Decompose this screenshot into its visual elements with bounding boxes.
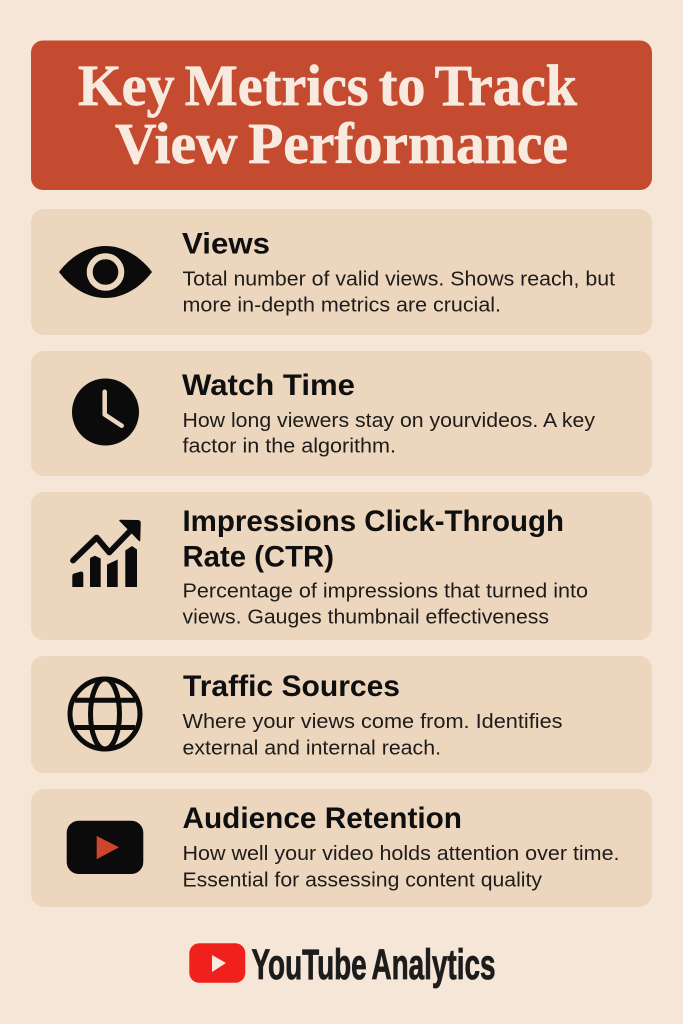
icon: eye [59,246,152,298]
panel: traffic sources [31,656,652,773]
text: traffic sources description [182,711,562,760]
icon: clock [72,378,139,446]
text: audience retention description: Essential for assessing content quality [182,870,542,892]
text: watch time description [182,410,595,458]
panel: impressions click-through rate [31,492,652,640]
text: audience retention description [182,843,620,892]
text: watch time description: How long viewers stay on yourvideos. A key [182,410,595,432]
panel: audience retention [31,789,652,907]
heading: watch time: Watch Time [182,369,355,402]
text: views description: Total number of valid views. Shows reach, but [182,269,615,291]
icon: YouTube logo [189,943,245,983]
heading: audience retention: Audience Retention [182,802,462,835]
panel: watch time [31,351,652,476]
text: traffic sources description: Where your views come from. Identifies [182,711,562,733]
text: traffic sources description: external and internal reach. [182,738,441,760]
heading: impressions click-through rate [182,505,564,574]
text: watch time description: factor in the algorithm. [182,436,396,458]
text: impressions description: Percentage of impressions that turned into [182,581,588,603]
icon: growth chart [72,520,140,587]
footer: YouTube Analytics logo [189,941,496,989]
title banner [31,40,652,190]
title banner: Key Metrics to Track [78,53,578,118]
heading: traffic sources: Traffic Sources [183,670,400,703]
heading: impressions click-through rate: Rate (CTR) [182,540,334,574]
heading: views: Views [182,228,270,260]
title banner: View Performance [115,111,568,176]
text: audience retention description: How well your video holds attention over time. [182,843,620,865]
panel: views [31,209,652,335]
wordmark: YouTube Analytics [252,941,496,989]
icon: globe [70,679,140,749]
icon: video play button [67,821,143,874]
text: views description: more in-depth metrics are crucial. [182,295,501,317]
text: impressions description [182,581,588,629]
text: impressions description: views. Gauges thumbnail effectiveness [182,607,549,629]
text: views description [182,269,615,317]
heading: impressions click-through rate: Impressions Click-Through [182,505,564,538]
